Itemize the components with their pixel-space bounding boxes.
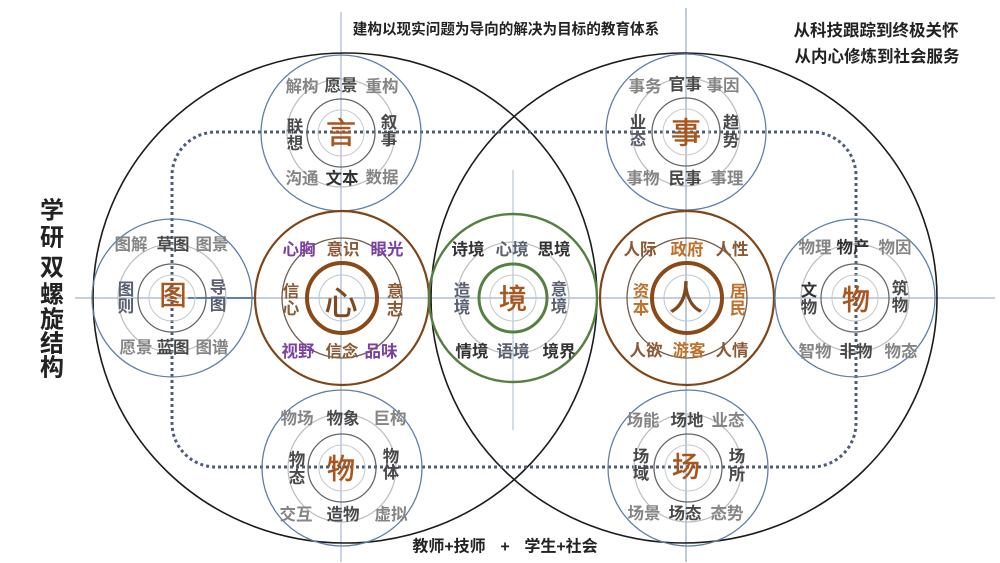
panel: 图: 图解	[114, 235, 148, 254]
left vertical heading: 螺	[40, 282, 64, 308]
panel: 心: 心	[324, 284, 358, 322]
panel: 心: 视野	[282, 342, 315, 361]
panel: 境: 心境	[496, 239, 528, 259]
panel: 境	[429, 214, 597, 382]
panel: 言: 叙	[381, 113, 398, 132]
left vertical heading: 旋	[40, 306, 64, 334]
panel: 人: 人际	[624, 240, 657, 259]
title: 建构以现实问题为导向的解决为目标的教育体系	[353, 20, 659, 38]
panel: 场: 场地	[670, 411, 704, 430]
panel: 境: 思境	[538, 239, 570, 259]
panel: 场: 态势	[710, 503, 744, 523]
panel: 人: 人欲	[630, 341, 663, 360]
bottom caption: 学生+社会	[524, 536, 598, 556]
panel: 人: 居	[730, 283, 746, 301]
panel: 物 bottom: 造物	[326, 505, 360, 524]
panel: 言: 事	[381, 130, 397, 149]
panel: 物 bottom: 物场	[280, 409, 314, 428]
panel: 场: 场	[633, 447, 649, 466]
panel: 物 bottom: 交互	[280, 504, 312, 524]
panel: 言: 文本	[326, 168, 359, 188]
panel: 言: 联	[287, 117, 304, 136]
bottom caption: +	[500, 538, 510, 556]
panel: 物 right: 物理	[798, 238, 832, 257]
right big circle	[431, 53, 937, 543]
panel: 言: 解构	[286, 77, 318, 96]
panel: 物 bottom: 巨构	[374, 409, 406, 428]
panel: 物 right: 物	[801, 298, 817, 317]
panel: 物 bottom: 物	[383, 447, 399, 466]
panel: 图: 导	[210, 278, 226, 297]
panel: 图: 图谱	[196, 338, 229, 357]
panel: 事: 业	[630, 113, 646, 132]
panel: 物 right: 物产	[836, 238, 870, 257]
panel: 物 bottom: 虚拟	[374, 504, 408, 524]
panel: 物 bottom: 物	[289, 450, 305, 469]
panel: 心: 信念	[326, 341, 359, 361]
panel: 图: 图	[210, 296, 226, 314]
top right caption: 从内心修炼到社会服务	[794, 46, 960, 66]
panel: 物 right: 非物	[840, 342, 872, 361]
panel: 人	[600, 211, 774, 385]
panel: 境: 情境	[456, 341, 488, 361]
bottom caption: 教师+技师	[412, 536, 486, 556]
panel: 心: 品味	[364, 342, 398, 361]
panel: 图: 蓝图	[156, 338, 190, 357]
left big circle	[93, 53, 597, 543]
panel: 事: 事物	[626, 169, 660, 188]
left vertical heading: 双	[40, 254, 64, 282]
panel: 图: 图	[160, 281, 186, 311]
panel: 图: 图景	[196, 235, 228, 254]
left vertical heading: 结	[40, 330, 64, 358]
panel: 境: 境	[551, 296, 567, 316]
panel: 事: 官事	[668, 75, 702, 94]
panel: 境: 意	[551, 279, 567, 299]
panel: 事: 势	[723, 131, 740, 150]
panel: 场: 场	[729, 447, 745, 466]
panel: 场: 场景	[628, 504, 660, 523]
panel: 心: 心	[283, 299, 300, 318]
panel: 言: 重构	[366, 77, 398, 96]
left vertical heading: 学	[40, 198, 64, 224]
panel: 言: 数据	[366, 168, 398, 187]
panel: 场: 场态	[668, 503, 702, 523]
panel: 物 right: 智物	[798, 341, 832, 361]
panel: 事: 民事	[668, 169, 702, 188]
panel: 场: 场	[672, 452, 700, 482]
panel: 事: 事理	[710, 169, 744, 188]
panel: 图: 图	[118, 281, 134, 299]
panel: 心: 心胸	[282, 240, 316, 259]
panel: 事: 趋	[723, 113, 740, 132]
left vertical heading	[40, 198, 64, 382]
panel: 事: 事务	[628, 77, 662, 96]
panel: 言: 想	[287, 134, 304, 153]
panel: 事	[606, 54, 766, 210]
panel: 物 right: 文	[801, 280, 818, 300]
panel: 物 bottom	[262, 390, 422, 546]
panel: 心: 志	[387, 300, 403, 319]
panel: 人: 游客	[672, 340, 706, 360]
panel: 图: 则	[118, 297, 134, 316]
panel: 场	[608, 390, 768, 546]
panel: 场: 所	[729, 465, 745, 484]
panel: 言: 沟通	[286, 169, 319, 188]
panel: 言: 愿景	[324, 76, 358, 95]
panel: 物 right: 物	[842, 284, 870, 316]
panel: 场: 业态	[712, 410, 745, 430]
panel: 物 bottom: 物象	[326, 408, 360, 428]
panel: 物 right: 物因	[878, 238, 912, 257]
panel: 境: 诗境	[452, 239, 484, 259]
panel: 图: 草图	[156, 235, 190, 254]
panel: 场: 场能	[626, 411, 660, 430]
top right caption: 从科技跟踪到终极关怀	[794, 20, 959, 40]
bottom caption	[412, 536, 598, 556]
panel: 物 right	[775, 219, 935, 377]
panel: 言: 言	[326, 118, 356, 150]
panel: 心: 意识	[326, 239, 360, 259]
panel: 图	[92, 219, 252, 377]
panel: 心	[255, 211, 429, 385]
panel: 人: 政府	[670, 239, 704, 259]
panel: 事: 事	[671, 118, 701, 150]
panel: 心: 眼光	[370, 240, 404, 259]
panel: 境: 境	[499, 284, 527, 314]
panel: 境: 语境	[496, 341, 530, 361]
panel: 人: 资	[633, 282, 649, 301]
panel: 物 bottom: 物	[327, 454, 355, 484]
panel: 物 bottom: 体	[383, 463, 400, 482]
panel: 人: 民	[730, 300, 746, 318]
panel: 物 right: 物	[892, 296, 908, 315]
panel: 人: 人情	[716, 341, 748, 360]
panel: 心: 意	[387, 281, 403, 301]
panel: 境: 境	[454, 297, 470, 317]
panel: 人: 人	[669, 280, 703, 318]
left vertical heading: 研	[40, 224, 64, 252]
panel: 物 right: 筑	[892, 278, 909, 298]
panel: 物 bottom: 态	[289, 467, 306, 487]
panel: 人: 人性	[716, 240, 748, 259]
dotted helix loop	[172, 132, 856, 467]
panel: 境: 境界	[542, 341, 576, 361]
panel: 物 right: 物态	[884, 341, 918, 361]
panel: 图: 愿景	[120, 338, 152, 357]
panel: 人: 本	[633, 299, 650, 318]
panel: 场: 域	[633, 464, 650, 483]
panel: 事: 态	[630, 129, 647, 149]
left vertical heading: 构	[40, 354, 64, 382]
panel: 事: 事因	[706, 76, 740, 95]
panel: 境: 造	[454, 281, 471, 300]
top right caption	[794, 20, 960, 66]
panel: 言	[261, 55, 421, 211]
panel: 心: 信	[283, 282, 299, 301]
